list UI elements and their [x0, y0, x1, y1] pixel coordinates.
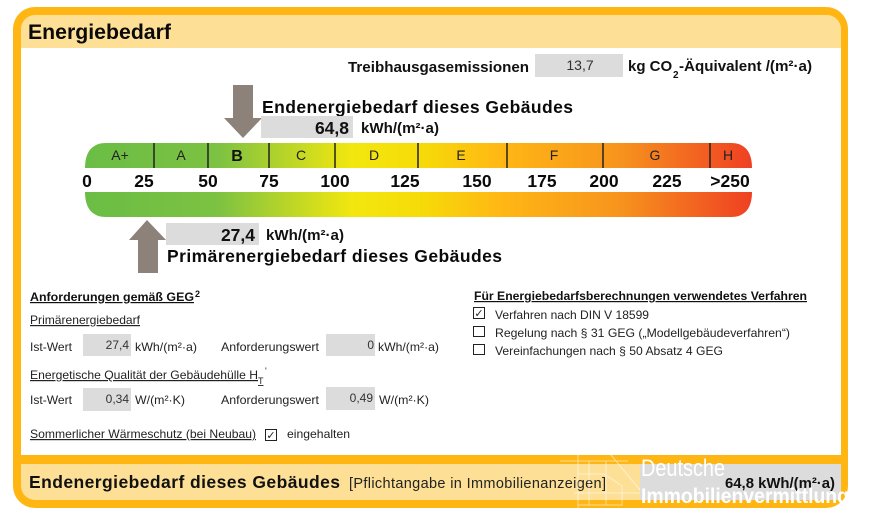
requirements block — [30, 289, 439, 442]
scale numbers: >250 — [710, 171, 750, 191]
energy class scale bar: A — [176, 147, 186, 163]
energy class scale bar: A+ — [111, 147, 129, 163]
footer value: 64,8 kWh/(m²·a) — [725, 475, 835, 492]
primary energy requirement: kWh/(m²·a) — [378, 340, 439, 354]
primary energy value: 27,4 — [221, 225, 255, 245]
primary energy value — [166, 223, 344, 245]
final energy value — [261, 116, 439, 138]
summer heat protection — [30, 427, 350, 442]
primary energy value: kWh/(m²·a) — [266, 228, 344, 244]
lower gradient bar — [85, 192, 752, 217]
energy class scale bar: C — [296, 147, 306, 163]
greenhouse gas emissions row: 13,7 — [566, 57, 594, 73]
scale numbers: 100 — [320, 171, 350, 191]
method options — [474, 308, 790, 358]
building envelope requirement: Energetische Qualität der Gebäudehülle H — [30, 368, 258, 382]
watermark text: Deutsche — [641, 455, 725, 482]
primary energy requirement: 0 — [367, 338, 374, 352]
greenhouse gas emissions row: Treibhausgasemissionen — [348, 59, 529, 76]
building envelope requirement: T — [258, 376, 264, 386]
final energy value: kWh/(m²·a) — [361, 121, 439, 137]
primary energy requirement: 27,4 — [106, 338, 129, 352]
building envelope requirement: 0,49 — [350, 391, 373, 405]
greenhouse gas emissions row — [348, 54, 812, 81]
title: Energiebedarf — [28, 20, 172, 44]
arrow: primary energy up — [129, 220, 166, 273]
method options: Vereinfachungen nach § 50 Absatz 4 GEG — [495, 344, 723, 358]
primary energy requirement: Ist-Wert — [30, 340, 73, 354]
scale numbers: 200 — [589, 171, 619, 191]
primary energy requirement: kWh/(m²·a) — [135, 340, 197, 354]
arrow: final energy down — [224, 85, 262, 138]
scale numbers: 0 — [82, 171, 92, 191]
summer heat protection: ✓ — [266, 430, 276, 442]
watermark — [560, 444, 849, 512]
scale numbers — [82, 171, 750, 191]
building envelope requirement: W/(m²·K) — [379, 393, 429, 407]
energy class scale bar: D — [369, 147, 379, 163]
summer heat protection: Sommerlicher Wärmeschutz (bei Neubau) — [30, 427, 256, 441]
primary energy requirement: Anforderungswert — [221, 340, 320, 354]
energy class scale bar: H — [723, 147, 733, 163]
building envelope requirement — [30, 366, 429, 411]
method options: ✓ — [474, 308, 484, 320]
energy class scale bar — [85, 143, 752, 168]
primary energy requirement — [30, 313, 439, 356]
scale numbers: 75 — [259, 171, 279, 191]
footer band — [21, 464, 841, 500]
primary energy heading: Primärenergiebedarf dieses Gebäudes — [167, 246, 502, 266]
scale numbers: 125 — [390, 171, 420, 191]
scale numbers: 225 — [652, 171, 682, 191]
greenhouse gas emissions row: 2 — [673, 70, 679, 81]
greenhouse gas emissions row: kg CO — [628, 58, 673, 75]
header band — [21, 15, 841, 48]
building envelope requirement: 0,34 — [106, 392, 129, 406]
scale numbers: 25 — [134, 171, 154, 191]
summer heat protection: eingehalten — [287, 427, 350, 441]
building envelope requirement: ' — [265, 366, 267, 376]
white content panel — [21, 48, 841, 455]
energy class scale bar: E — [456, 147, 466, 163]
building envelope requirement: Ist-Wert — [30, 393, 73, 407]
watermark: Immobilienvermittlung — [641, 485, 849, 508]
final energy heading: Endenergiebedarf dieses Gebäudes — [262, 97, 573, 117]
scale numbers: 150 — [462, 171, 492, 191]
scale numbers: 175 — [527, 171, 557, 191]
final energy value: 64,8 — [315, 118, 349, 138]
method heading: Für Energiebedarfsberechnungen verwendetes Verfahren — [474, 289, 807, 303]
footer heading: Endenergiebedarf dieses Gebäudes — [29, 472, 340, 492]
building envelope requirement: W/(m²·K) — [135, 393, 185, 407]
calculation method block — [474, 289, 807, 358]
greenhouse gas emissions row: -Äquivalent /(m²·a) — [679, 58, 812, 75]
energy class scale bar: F — [550, 147, 558, 163]
requirements heading: Anforderungen gemäß GEG — [30, 290, 194, 304]
building envelope requirement: Anforderungswert — [221, 393, 320, 407]
method options: Regelung nach § 31 GEG („Modellgebäudeverfahren“) — [495, 326, 790, 340]
primary energy requirement: Primärenergiebedarf — [30, 313, 141, 327]
scale numbers: 50 — [198, 171, 218, 191]
energy class scale bar: G — [650, 147, 660, 163]
requirements heading: 2 — [195, 289, 200, 299]
method options: Verfahren nach DIN V 18599 — [495, 308, 649, 322]
energy class scale bar: B — [231, 148, 243, 165]
footer note: [Pflichtangabe in Immobilienanzeigen] — [349, 476, 606, 492]
